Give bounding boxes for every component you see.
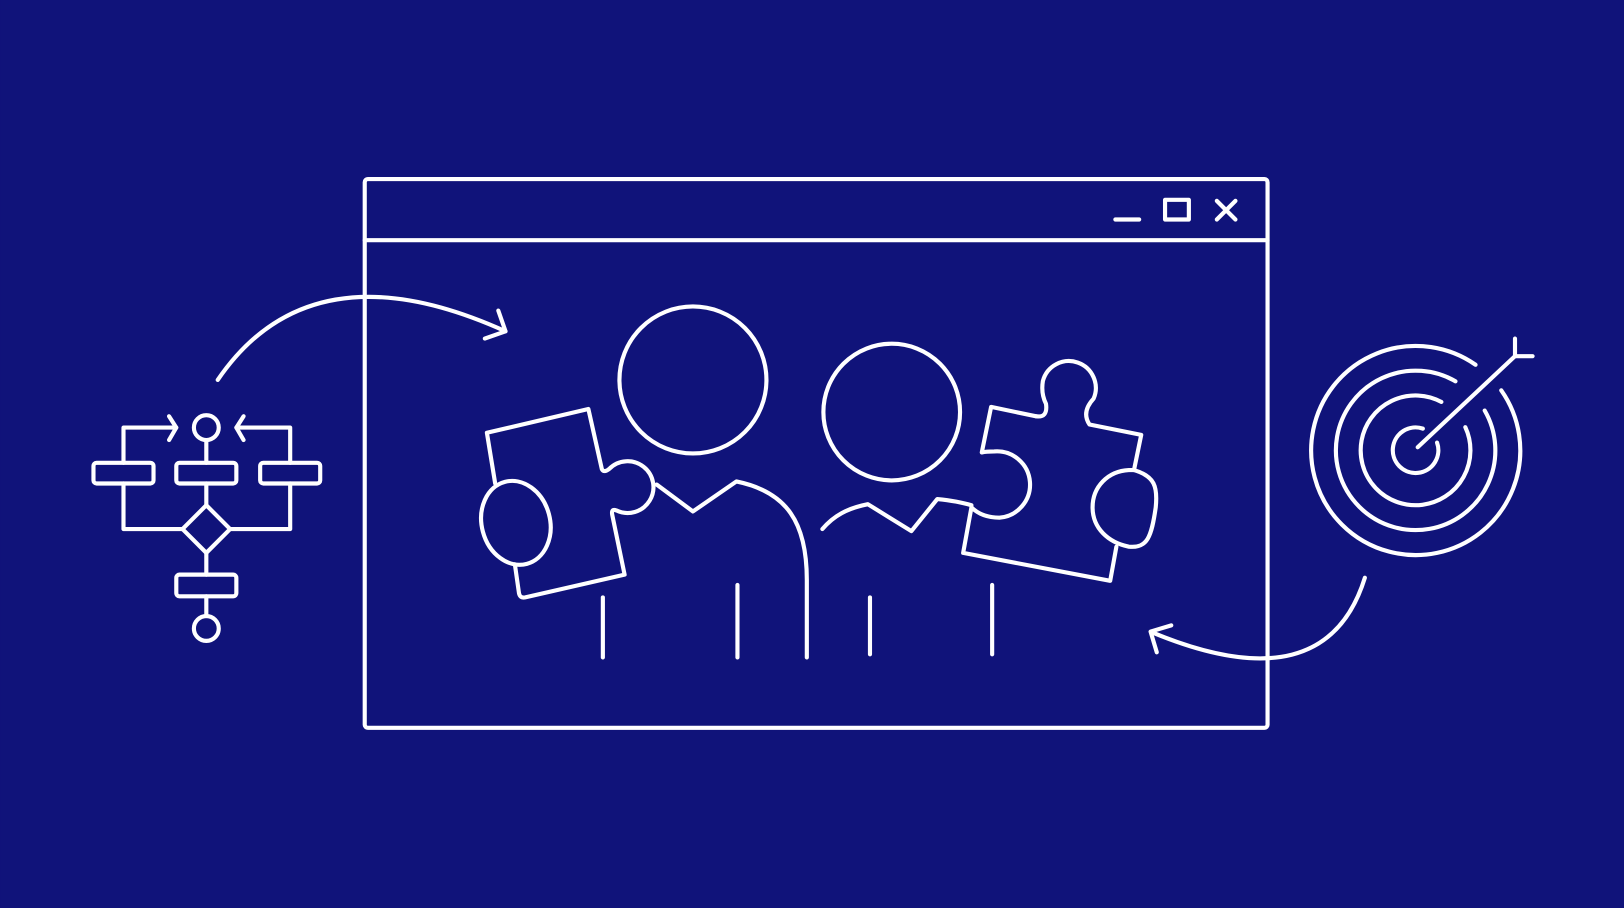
person 2 with puzzle piece xyxy=(822,344,1156,654)
puzzle piece right xyxy=(1036,361,1141,470)
arrow: flowchart to window xyxy=(218,297,506,380)
arrow: target to window xyxy=(1151,578,1365,658)
person 1 with puzzle piece xyxy=(472,306,807,657)
browser window xyxy=(365,179,1268,728)
window controls xyxy=(1115,200,1235,219)
icon: target with arrow xyxy=(1311,339,1533,555)
icon: flowchart xyxy=(93,415,320,641)
puzzle piece left xyxy=(487,409,653,598)
